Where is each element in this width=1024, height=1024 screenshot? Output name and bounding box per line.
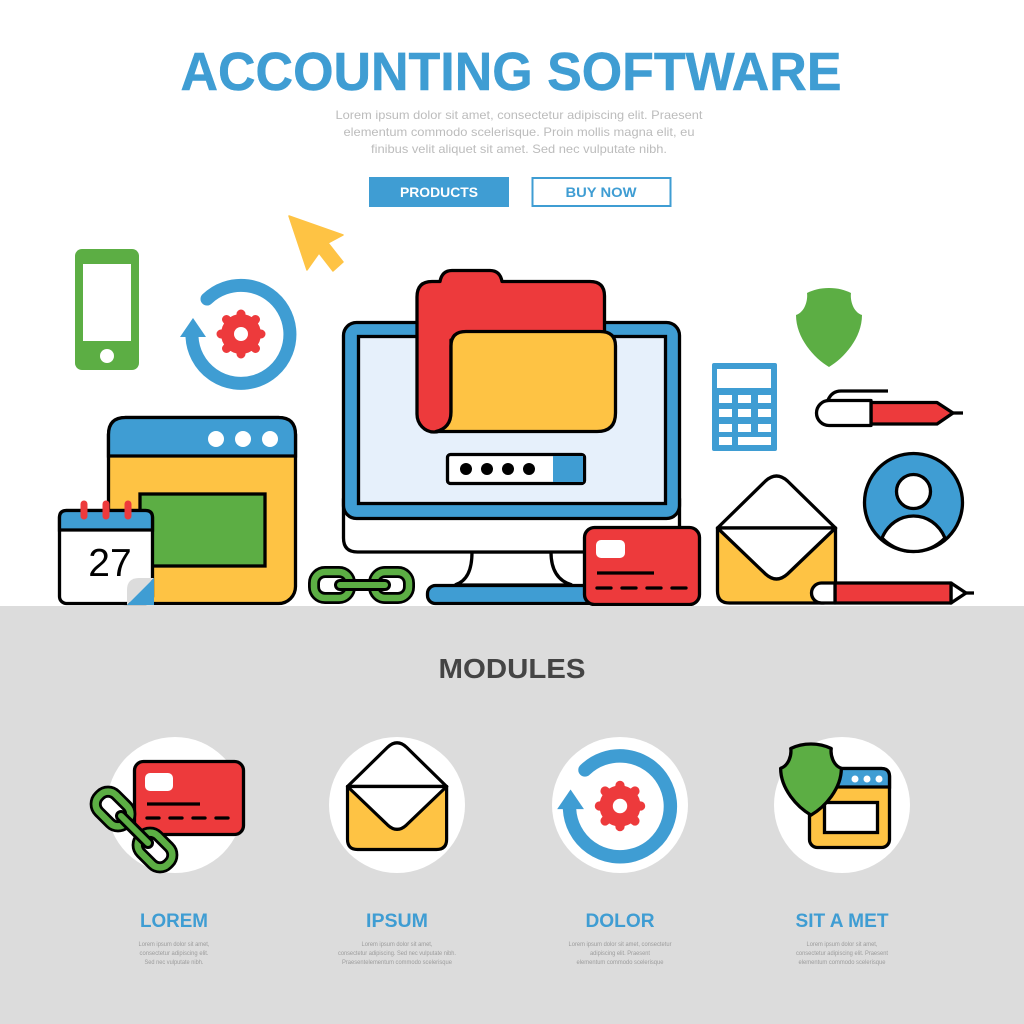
icon: calendar: 27 [88,542,132,585]
icon: open envelope [718,476,836,603]
label: ipsum: IPSUM [366,911,428,932]
description: dolor: Lorem ipsum dolor sit amet, consectetur [568,942,672,948]
description: sit a met: elementum commodo scelerisque [798,960,886,966]
icon: smartphone [75,249,139,370]
icon: shield [796,288,862,367]
description: dolor: adipiscing elit. Praesent [590,951,650,957]
label: dolor: DOLOR [586,911,655,932]
icon: browser window [108,418,296,604]
icon: ballpoint pen [816,391,963,426]
button: buy now: BUY NOW [566,184,637,200]
icon: shield [781,744,841,815]
icon: small window [810,768,890,848]
module circle [107,737,243,873]
icon: calculator [712,363,777,451]
module circle [774,737,910,873]
icon: user avatar [864,454,962,552]
icon: refresh gear [180,285,290,383]
module: dolor [552,737,688,966]
icon: credit card [584,528,700,604]
icon: pencil [812,583,974,603]
icon: chain link [314,572,409,598]
description: dolor [568,942,672,966]
panel: modules background [0,606,1024,1024]
button: products: PRODUCTS [400,184,478,200]
panel: header [180,42,842,207]
description: sit a met [796,942,888,966]
description: sit a met: consectetur adipiscing elit. Praesent [796,951,888,957]
heading: modules: MODULES [438,653,586,684]
description: sit a met: Lorem ipsum dolor sit amet, [806,942,878,948]
icon: desktop monitor [344,322,680,604]
description: ipsum: Lorem ipsum dolor sit amet, [362,942,433,948]
description: dolor: elementum commodo scelerisque [576,960,664,966]
description: lorem: Sed nec vulputate nibh. [144,960,204,966]
module: ipsum [329,737,465,966]
icon: folder [417,270,616,432]
intro text: finibus velit aliquet sit amet. Sed nec vulputate nibh. [371,142,667,156]
description: lorem: consectetur adipiscing elit. [140,951,209,957]
description: ipsum: Praesentelementum commodo scelerisque [342,960,453,966]
intro text: elementum commodo scelerisque. Proin mollis magna elit, eu [344,125,694,139]
icon: card [134,762,244,834]
icon: refresh gear [557,756,670,857]
module circle [552,737,688,873]
description: ipsum: consectetur adipiscing. Sed nec vulputate nibh. [338,951,456,957]
intro text: Lorem ipsum dolor sit amet, consectetur adipiscing elit. Praesent [336,108,703,122]
module: lorem [91,737,244,966]
label: lorem: LOREM [140,911,208,932]
description: lorem: Lorem ipsum dolor sit amet, [138,942,210,948]
module: sit a met [774,737,910,966]
description: lorem [138,942,210,966]
icon: chain [91,787,177,872]
button: products [369,177,509,207]
description: ipsum [338,942,456,966]
title: ACCOUNTING SOFTWARE [180,42,842,102]
icon: calendar [60,504,154,605]
module circle [329,737,465,873]
intro text [336,108,703,156]
button: buy now [532,178,670,206]
icon: envelope [348,743,447,850]
label: sit a met: SIT A MET [796,911,889,932]
icon: cursor arrow [289,216,343,271]
password field [448,454,584,484]
